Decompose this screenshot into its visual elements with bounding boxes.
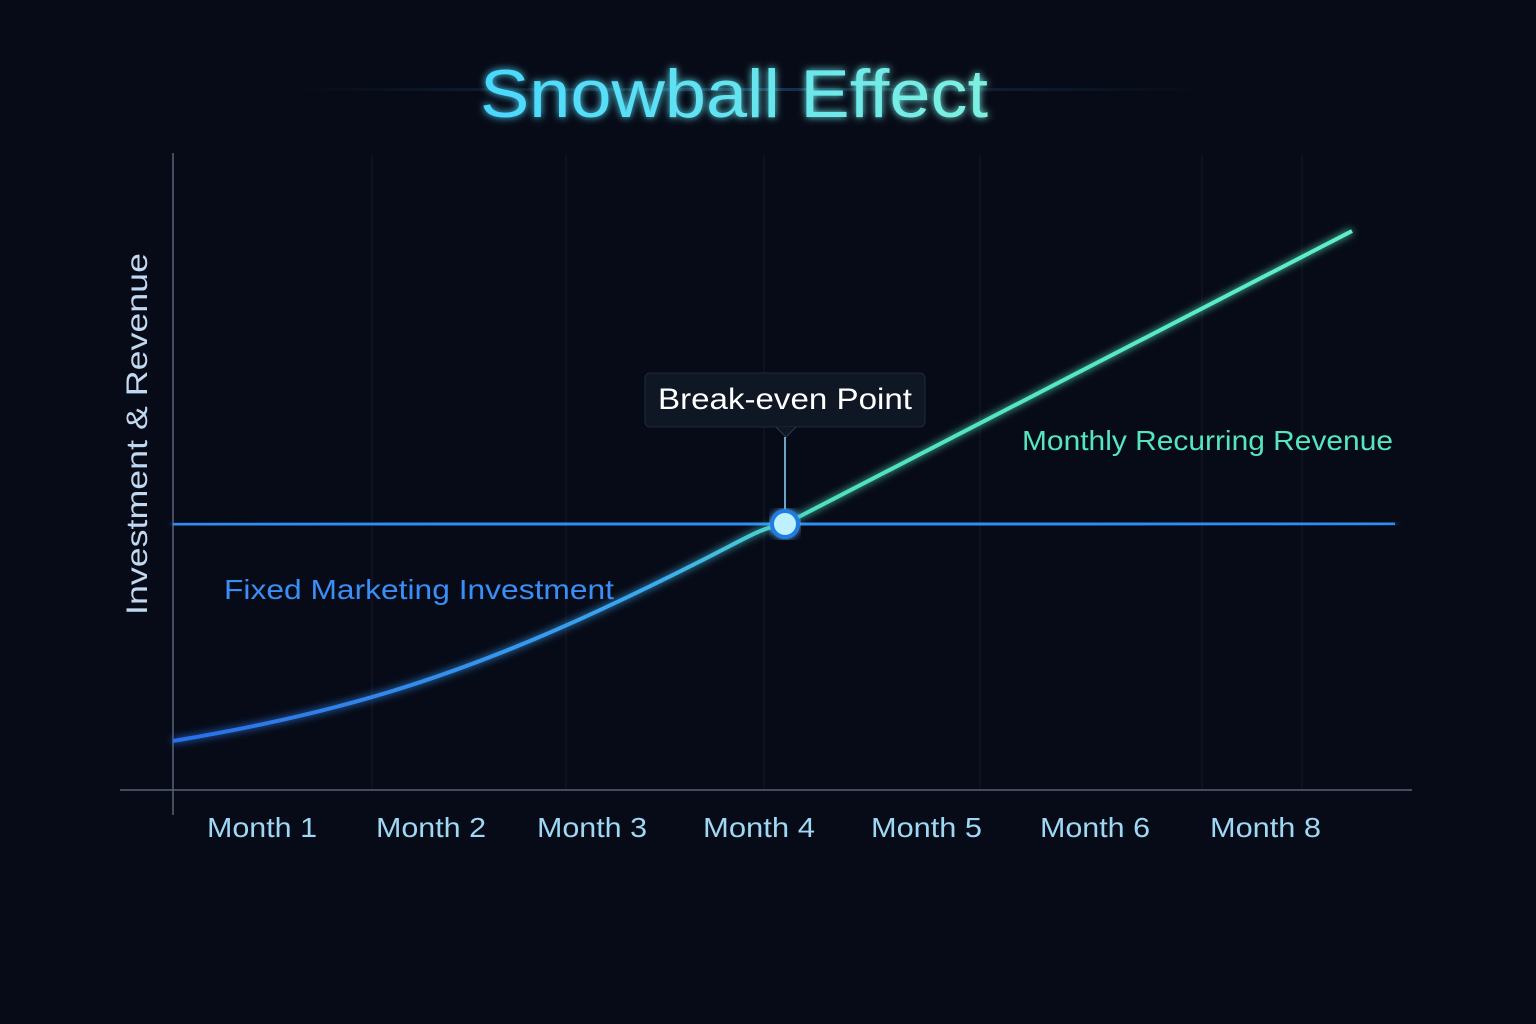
x axis labels bbox=[207, 812, 1321, 843]
callout: break-even point: Break-even Point bbox=[658, 383, 913, 416]
label: monthly recurring revenue: Monthly Recurring Revenue bbox=[1022, 425, 1393, 456]
axes bbox=[120, 153, 1412, 815]
label: fixed marketing investment: Fixed Marketing Investment bbox=[224, 574, 614, 605]
x axis labels: Month 6 bbox=[1040, 812, 1150, 843]
x axis labels: Month 4 bbox=[703, 812, 815, 843]
callout: break-even point bbox=[645, 373, 925, 537]
line: fixed marketing investment bbox=[173, 523, 1395, 525]
title: Snowball Effect bbox=[480, 56, 988, 132]
x axis labels: Month 3 bbox=[537, 812, 647, 843]
y axis label: Investment & Revenue bbox=[121, 253, 154, 615]
x axis labels: Month 5 bbox=[871, 812, 982, 843]
x axis labels: Month 8 bbox=[1210, 812, 1321, 843]
x axis labels: Month 2 bbox=[376, 812, 486, 843]
x axis labels: Month 1 bbox=[207, 812, 317, 843]
line: monthly recurring revenue bbox=[173, 231, 1352, 741]
